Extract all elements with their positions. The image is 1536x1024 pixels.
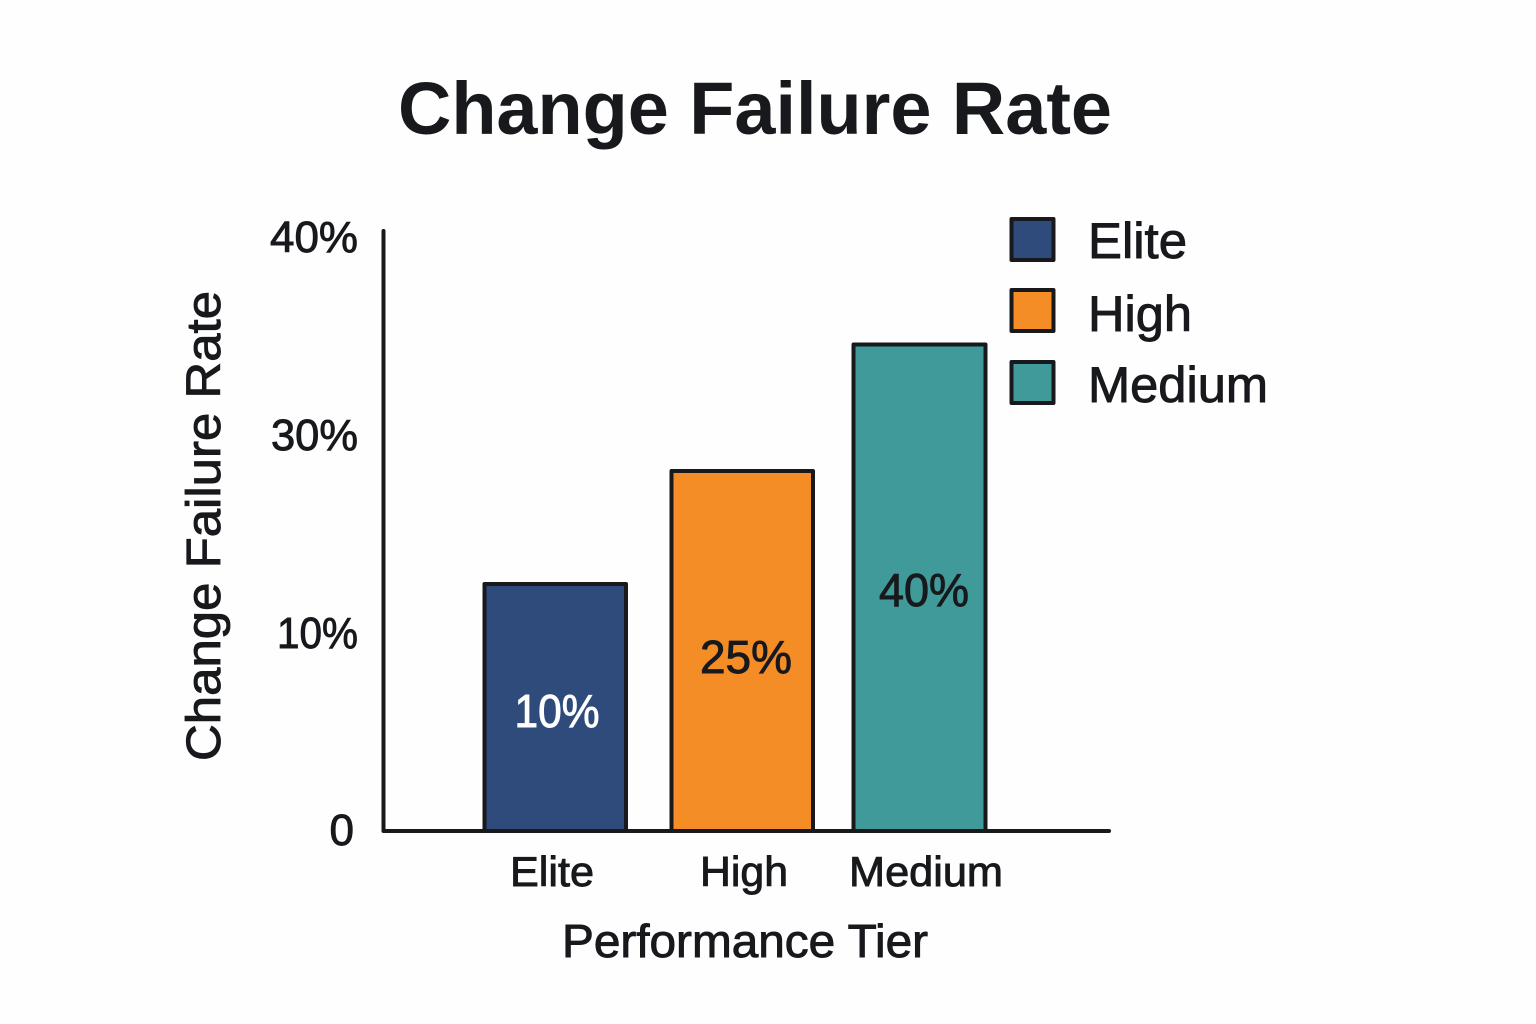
- legend: [1012, 213, 1268, 413]
- x axis tick labels: Medium: [849, 848, 1003, 895]
- axes: [384, 231, 1109, 831]
- y axis tick labels: 10%: [277, 609, 358, 658]
- bar: Elite: 10%: [514, 685, 600, 737]
- bar: High: [672, 471, 813, 831]
- x axis title: Performance Tier: [562, 915, 928, 967]
- x axis tick labels: Elite: [510, 848, 594, 895]
- legend item: Medium: [1012, 357, 1268, 413]
- bar: Medium: [854, 344, 986, 831]
- legend item: High: [1012, 286, 1192, 342]
- bar: Medium: 40%: [879, 564, 969, 616]
- y axis tick labels: [270, 213, 358, 855]
- bar: High: 25%: [700, 631, 792, 683]
- y axis tick labels: 0: [330, 806, 354, 855]
- legend item: High: High: [1088, 286, 1192, 342]
- y axis tick labels: 40%: [270, 213, 358, 262]
- x axis tick labels: [510, 848, 1003, 895]
- y axis title: Change Failure Rate: [178, 291, 231, 761]
- bar: Elite: [484, 584, 626, 831]
- legend item: Medium: Medium: [1088, 357, 1268, 413]
- legend item: Elite: [1012, 213, 1187, 269]
- x axis tick labels: High: [700, 848, 788, 895]
- title: Change Failure Rate: [398, 67, 1112, 150]
- legend item: Elite: Elite: [1088, 213, 1187, 269]
- y axis tick labels: 30%: [271, 411, 358, 460]
